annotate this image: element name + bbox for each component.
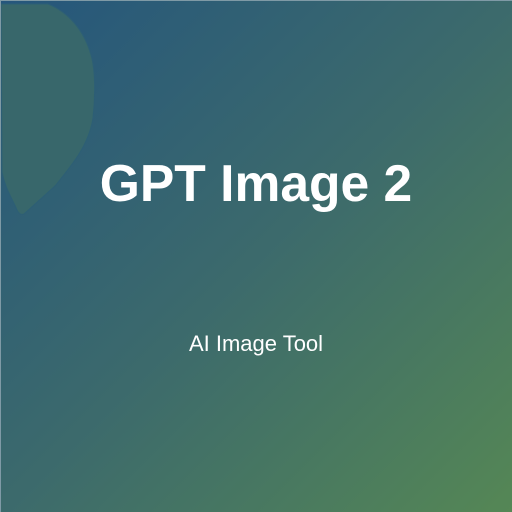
subtitle: AI Image Tool [189,331,323,356]
title: GPT Image 2 [100,154,412,212]
